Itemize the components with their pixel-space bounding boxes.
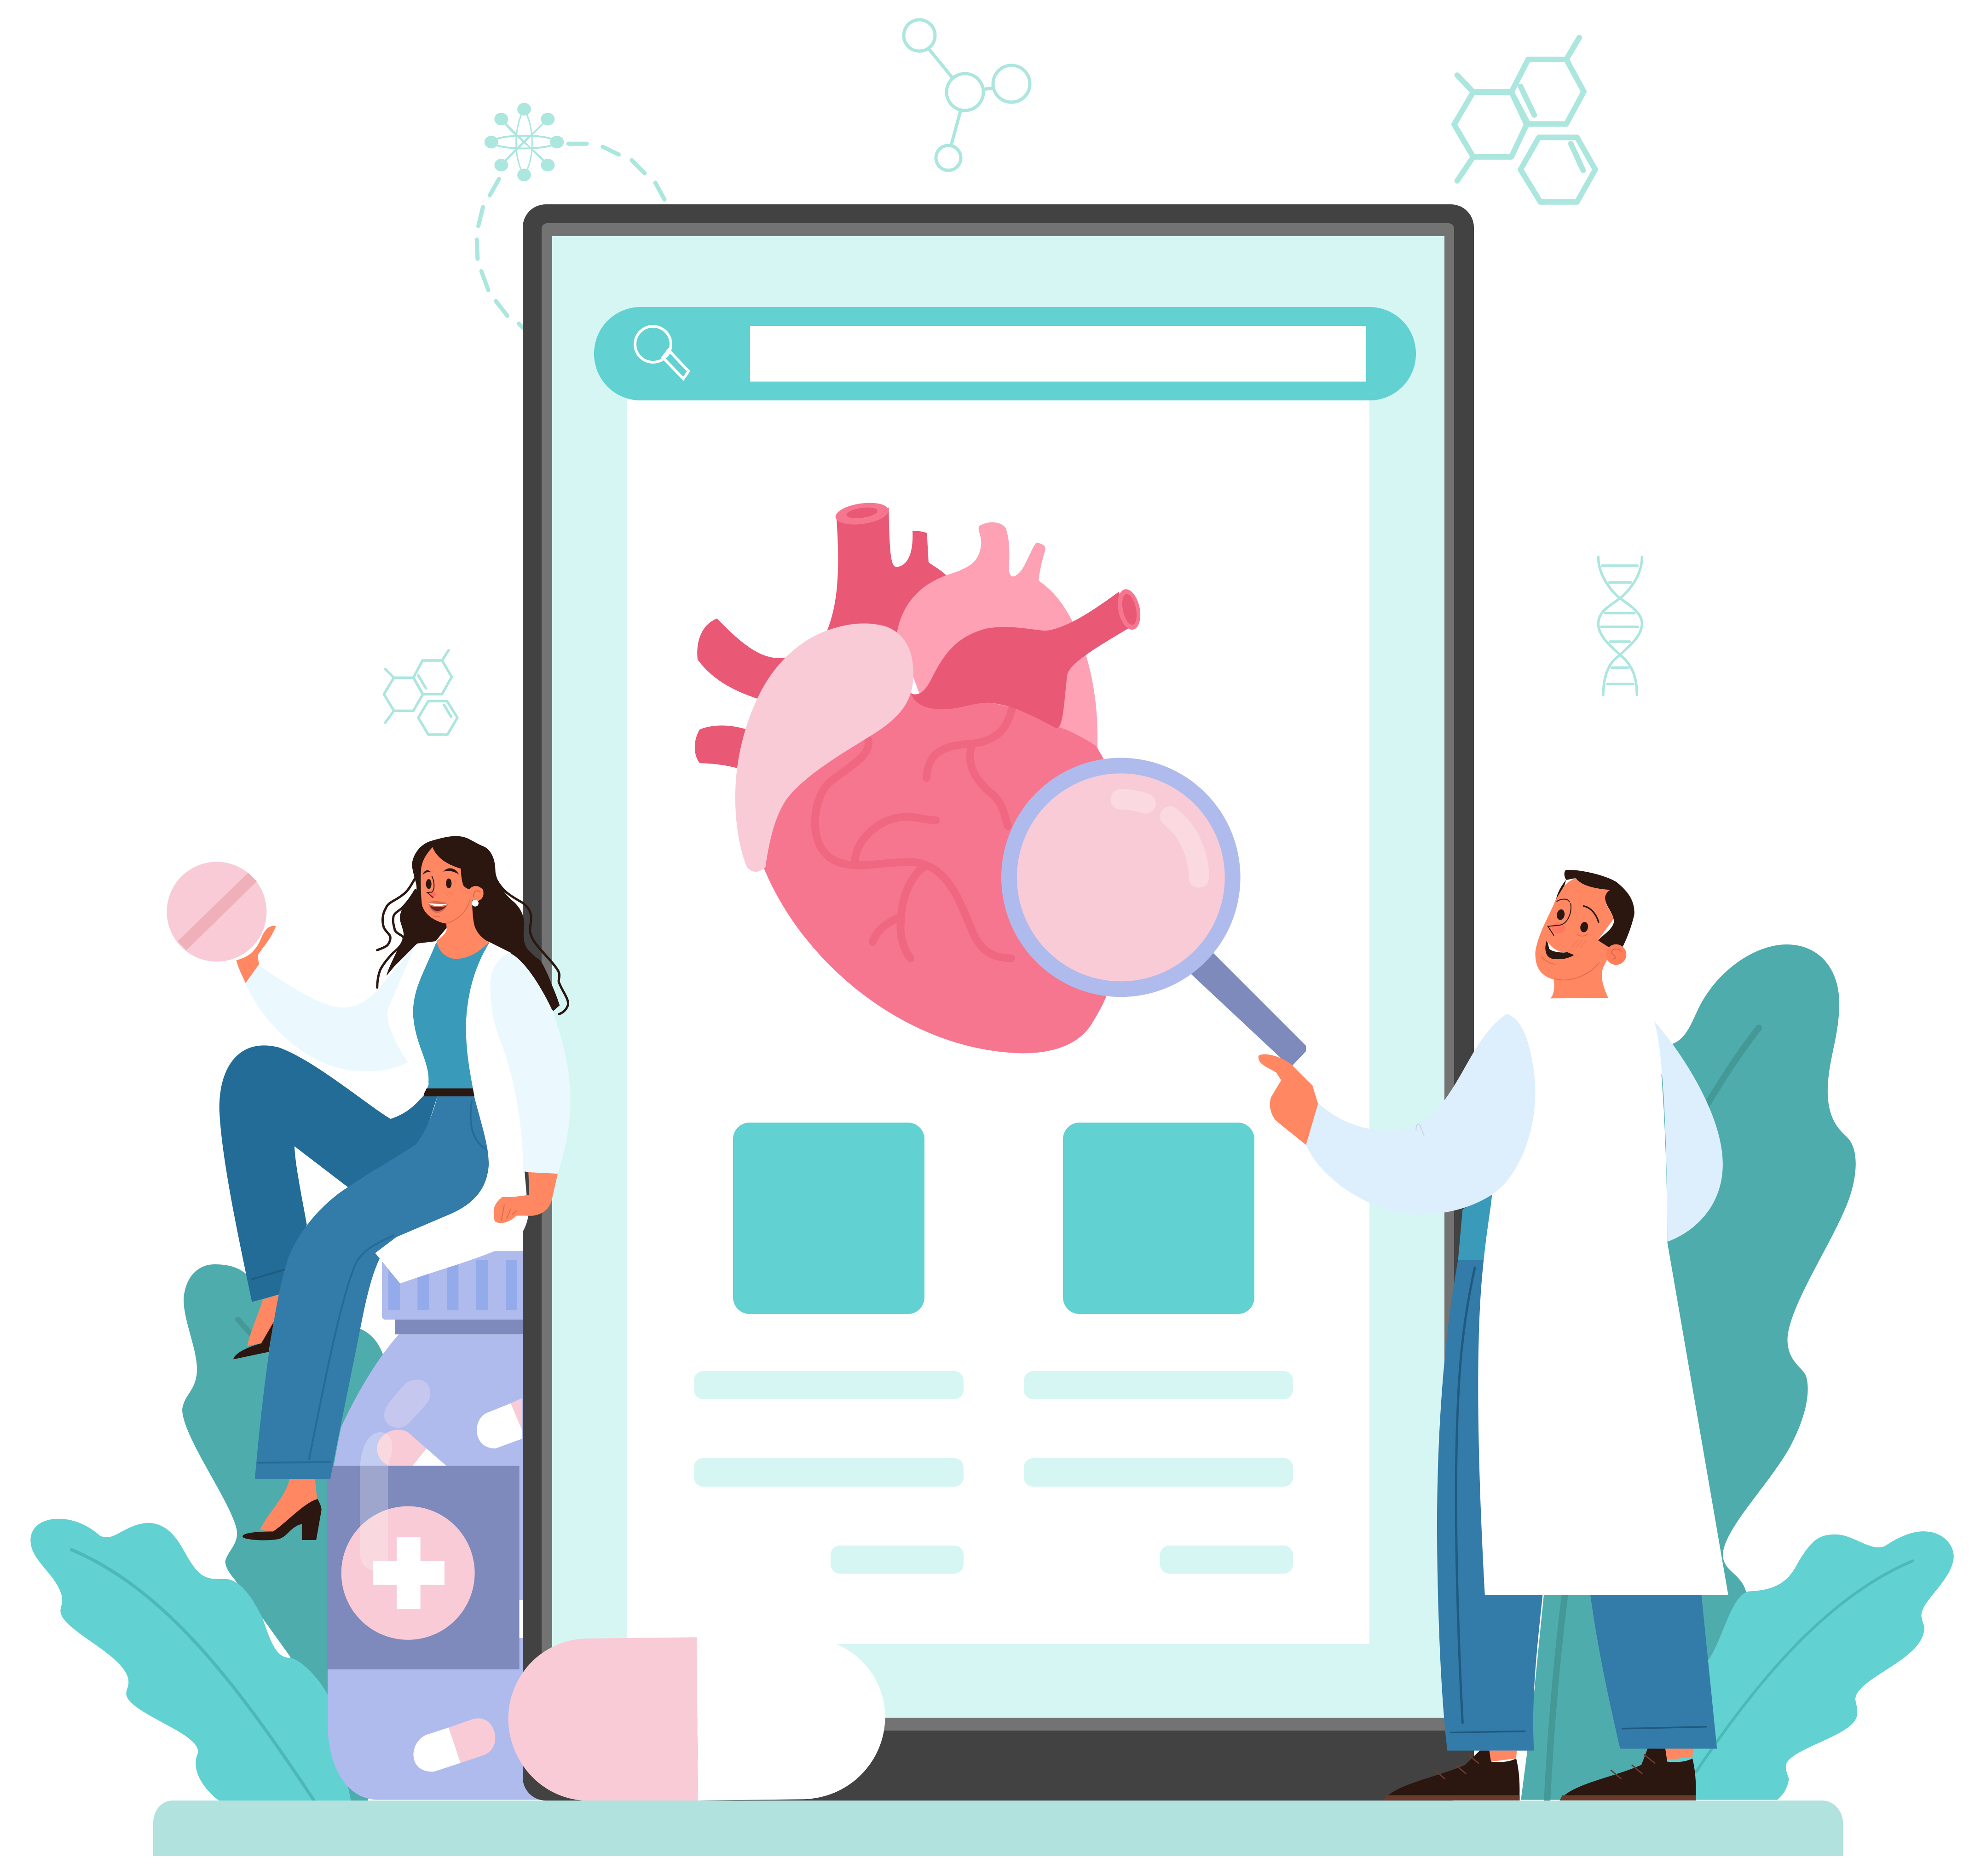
heart anatomy [695, 500, 1144, 1053]
giant capsule [508, 1637, 885, 1801]
bottle label [327, 1466, 523, 1669]
text placeholder bars [694, 1371, 1293, 1574]
coat left front [343, 941, 437, 1119]
icon: large hexagon molecule [1454, 38, 1595, 202]
raised sleeve [245, 945, 416, 1071]
pills inside bottle [377, 1380, 522, 1466]
shirt [1458, 1190, 1493, 1260]
search bar [594, 307, 1416, 400]
bottle body [328, 1334, 543, 1800]
ventricle [763, 692, 1109, 1053]
right shoe [1560, 1749, 1696, 1801]
pointing hand [1259, 1054, 1318, 1145]
bottle cap [382, 1251, 535, 1334]
coat raised sleeve [1306, 1014, 1535, 1215]
woman face [421, 847, 489, 959]
coat body [1478, 998, 1728, 1595]
right atrium [735, 624, 913, 872]
front leg [255, 1096, 489, 1479]
magnifying glass [1001, 758, 1306, 1067]
coat right front [375, 943, 528, 1284]
plant: front leaf left [30, 1519, 351, 1801]
plant: dark leaf right [1521, 944, 1856, 1800]
back leg [219, 1045, 438, 1302]
plant: dark leaf left [182, 1264, 383, 1801]
aorta [695, 508, 946, 769]
content cards [733, 1123, 1254, 1314]
icon: small hexagon molecule [384, 650, 457, 735]
coat sleeve [490, 953, 570, 1174]
ground platform [153, 1801, 1843, 1856]
man doctor [1259, 870, 1728, 1801]
phone inner bezel [542, 223, 1454, 1731]
phone screen [552, 236, 1444, 1718]
trousers right leg [1590, 1595, 1717, 1749]
hair back and strands [377, 836, 568, 1014]
body and clothing [1259, 998, 1728, 1801]
left shoe [1384, 1751, 1520, 1801]
pill on bottle base [413, 1718, 495, 1772]
icon: search magnifier [635, 326, 690, 382]
icon: network molecule with dashed orbit [477, 103, 664, 328]
phone [523, 204, 1474, 1801]
icon: DNA helix [1598, 557, 1642, 695]
left atrium [897, 522, 1097, 756]
pulmonary artery [911, 592, 1131, 728]
plant: front leaf right [1633, 1531, 1954, 1800]
phone body [523, 204, 1474, 1801]
back foot [233, 1295, 279, 1359]
man face [1536, 870, 1634, 998]
pill held up [167, 862, 266, 961]
magnifier lens [1001, 758, 1241, 997]
content panel [627, 396, 1369, 1644]
woman doctor [167, 836, 570, 1540]
coronary arteries [815, 709, 1012, 958]
icon: ball and stick molecule [904, 20, 1030, 170]
medicine bottle [327, 1251, 543, 1800]
resting hand [494, 1172, 558, 1223]
trousers left leg [1437, 1260, 1542, 1751]
shirt and belt [413, 943, 490, 1096]
coat back sleeve [1654, 1021, 1723, 1242]
magnifier handle [1191, 953, 1306, 1067]
hand holding pill [237, 926, 276, 984]
front foot [243, 1479, 322, 1540]
body and clothing [219, 926, 570, 1540]
bottle highlight [360, 1432, 393, 1572]
